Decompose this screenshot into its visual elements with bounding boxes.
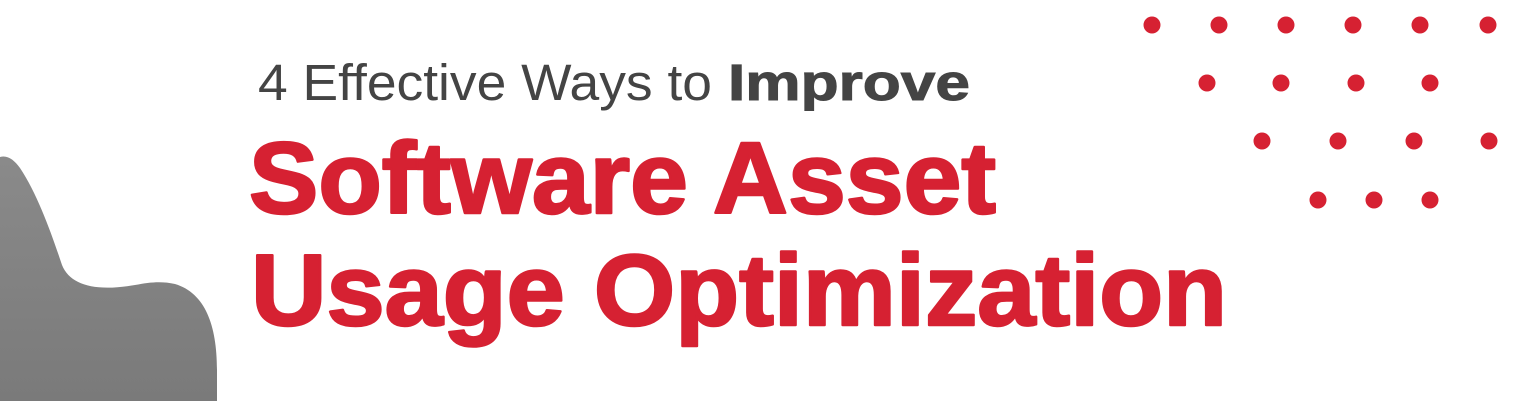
main title bbox=[249, 123, 1227, 347]
decorative gray blob bbox=[0, 157, 217, 401]
dot pattern bbox=[1144, 16, 1498, 208]
main title: Usage Optimization bbox=[251, 235, 1227, 347]
main title: Software Asset bbox=[249, 123, 996, 235]
subtitle line: 4 Effective Ways to bbox=[258, 54, 712, 111]
subtitle line: Improve bbox=[728, 54, 970, 111]
subtitle line bbox=[258, 54, 970, 111]
